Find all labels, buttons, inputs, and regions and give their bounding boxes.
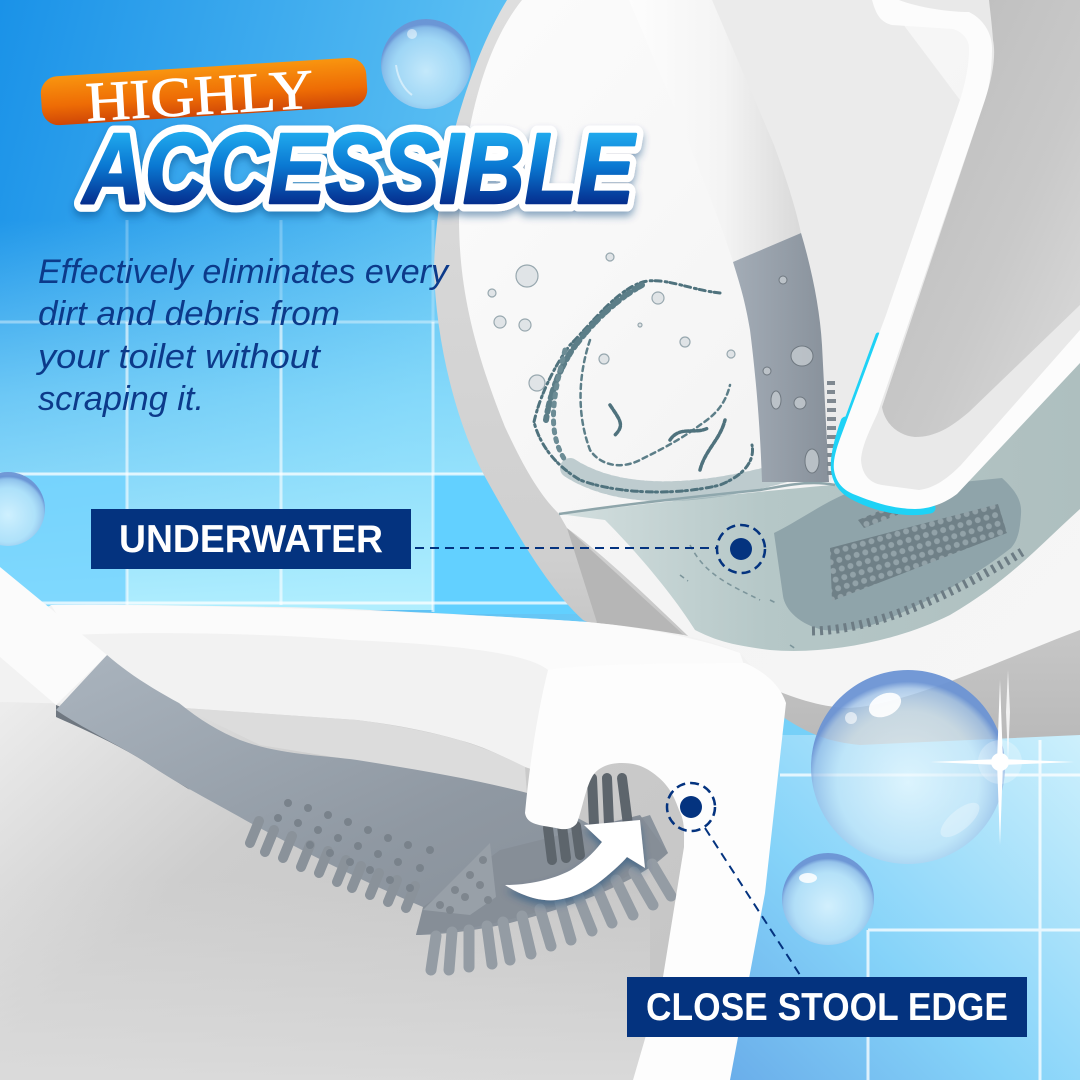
brush bristles left [250, 821, 415, 908]
panel: upper toilet bowl with brush underwater [434, 0, 1080, 745]
icon: white curved arrow [505, 820, 645, 900]
grey brush neck [733, 233, 836, 482]
icon: bubble top [381, 19, 471, 109]
orange banner [40, 57, 368, 126]
callout: underwater: UNDERWATER [119, 518, 383, 561]
underwater brush head [774, 478, 1022, 631]
heading: accessible: ACCESSIBLE [80, 113, 637, 225]
white brush handle [0, 567, 107, 705]
water droplets [488, 29, 750, 391]
under rim cavity shading [184, 708, 527, 795]
icon: bubble left [0, 472, 45, 546]
water surface [559, 483, 835, 514]
bowl wall [0, 700, 720, 1080]
nubs on brush back [274, 799, 434, 892]
text block: description [36, 253, 450, 418]
text block: description: scraping it. [38, 380, 204, 418]
callout: underwater [91, 509, 765, 573]
icon: sparkle [930, 670, 1075, 845]
bowl inner surface [459, 0, 1080, 708]
brush bristles bottom [431, 864, 671, 970]
white brush handle [629, 0, 801, 262]
shaded wall right of handle [712, 0, 960, 482]
grey brush neck and head [56, 655, 671, 970]
icon: bubble large [811, 670, 1005, 864]
text block: description: your toilet without [36, 338, 322, 376]
water in the bowl [559, 340, 1080, 651]
rim with cyan edge [834, 0, 1080, 510]
callout: close stool edge: CLOSE STOOL EDGE [646, 986, 1008, 1029]
icon: bubble small [782, 853, 874, 945]
circular splash under the marker [680, 545, 796, 649]
brush bristles top [548, 778, 628, 860]
rim top surface [0, 605, 781, 780]
nub cluster near tip [423, 843, 496, 915]
white rim block with notch [525, 663, 786, 1080]
panel: lower toilet with brush under rim [0, 567, 786, 1080]
title: highly accessible [40, 57, 637, 225]
heading: highly: HIGHLY [84, 59, 315, 134]
text block: description: Effectively eliminates every [38, 253, 450, 291]
bowl outer band [434, 0, 1080, 745]
brush head plate [416, 815, 668, 935]
water splash [534, 281, 800, 492]
callout: close stool edge [627, 783, 1027, 1037]
text block: description: dirt and debris from [38, 295, 340, 333]
heading: accessible: ACCESSIBLE [80, 113, 637, 225]
